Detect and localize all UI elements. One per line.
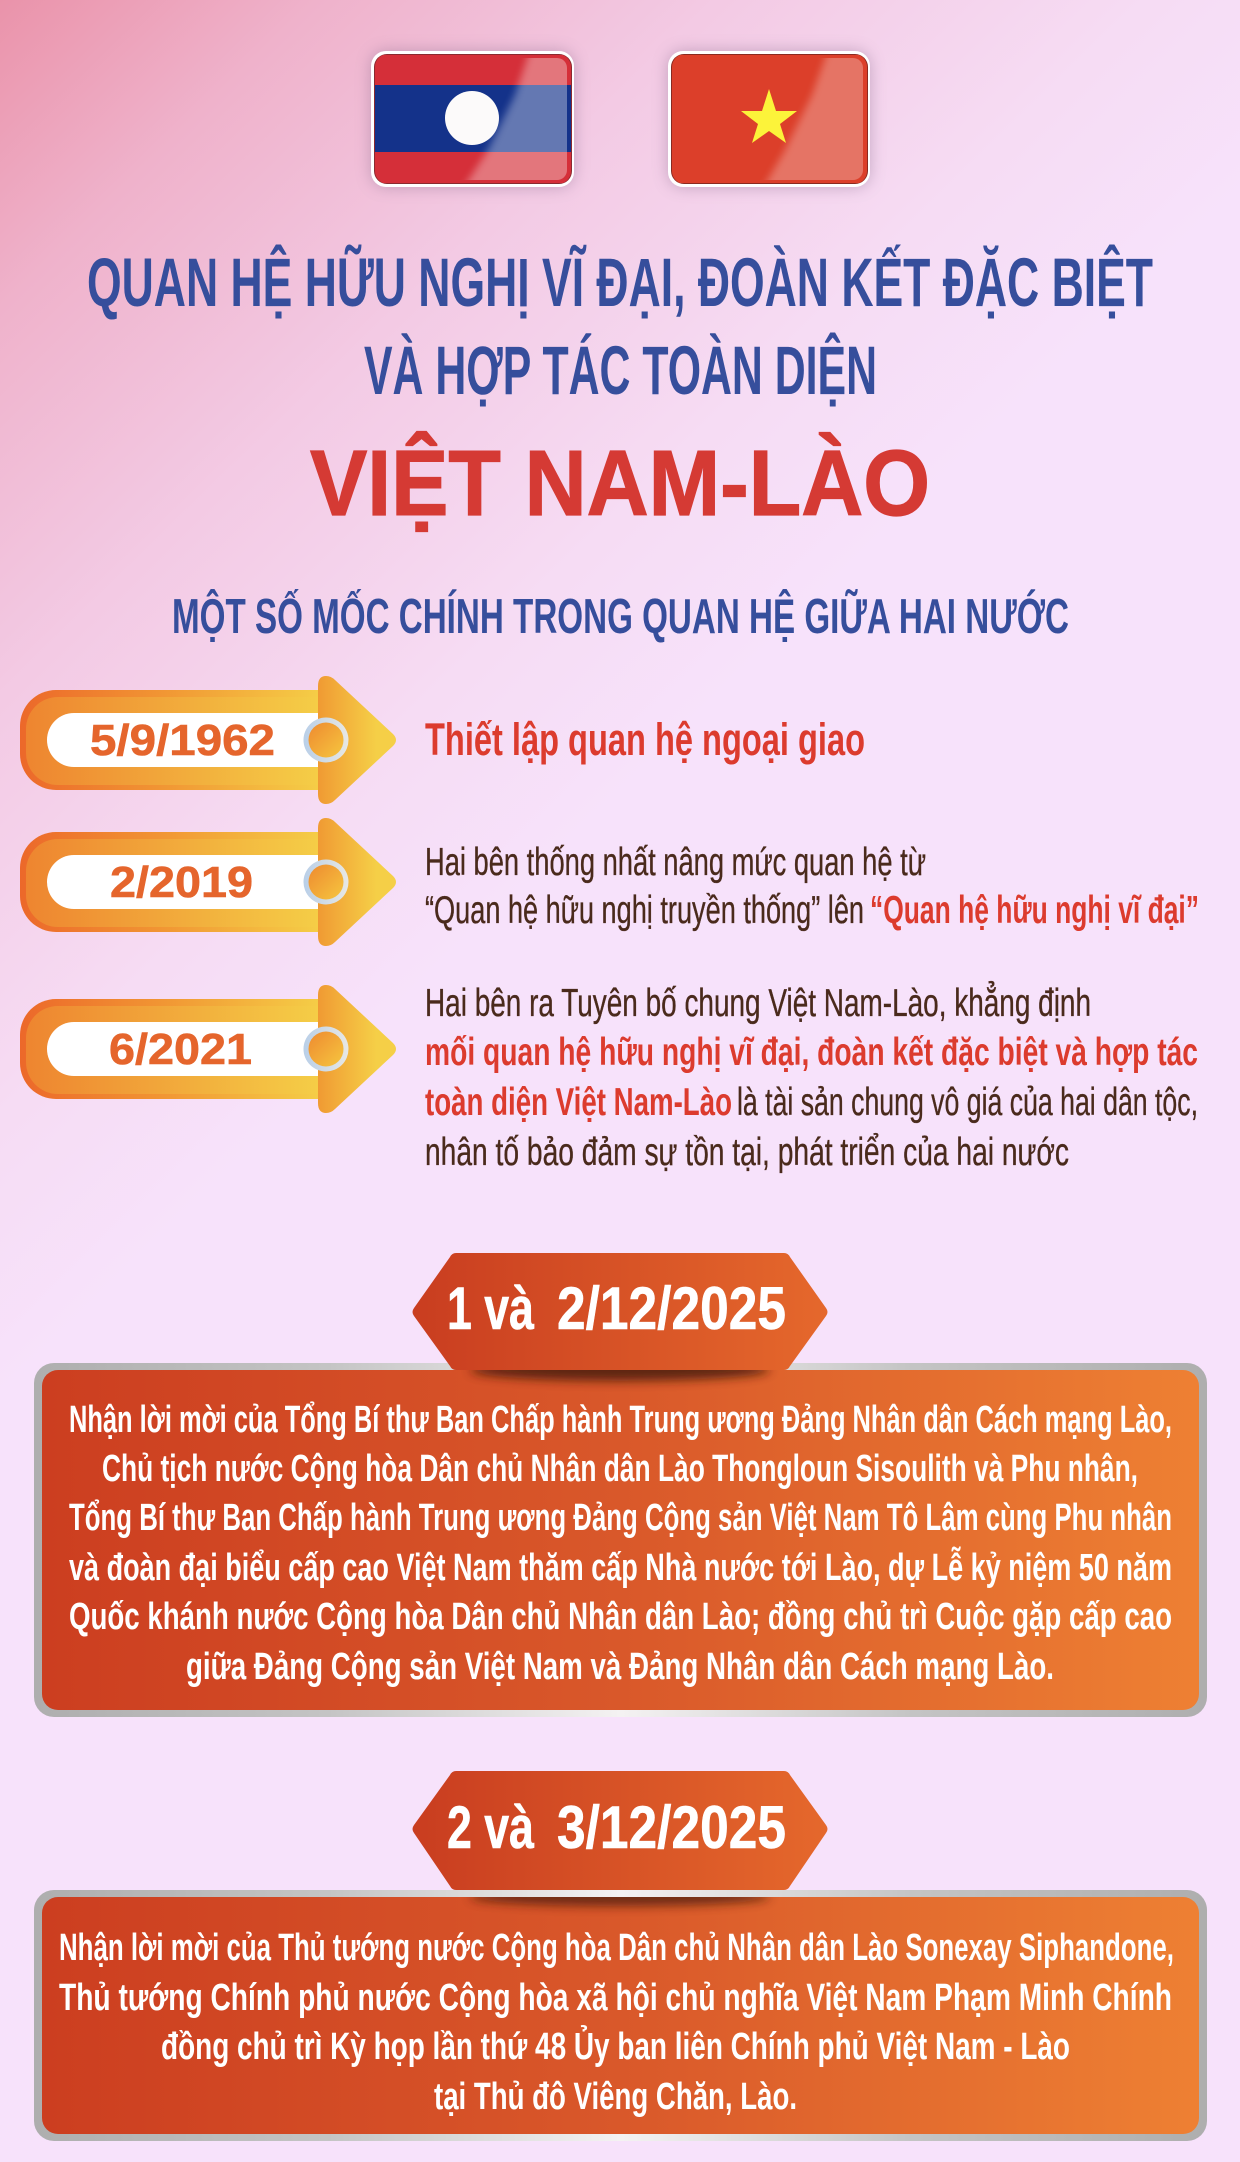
milestone arrow: 5/9/1962	[20, 676, 396, 804]
milestone text: 2/2019: Hai bên thống nhất nâng mức quan hệ từ	[425, 841, 926, 884]
milestone arrow: 2/2019: 2/2019	[110, 858, 253, 907]
date tag: 1 và 2/12/2025	[412, 1253, 828, 1370]
date tag: 1 và 2/12/2025: 2/12/2025	[557, 1275, 786, 1342]
title: VÀ HỢP TÁC TOÀN DIỆN	[364, 332, 877, 409]
milestone arrow: 6/2021	[20, 985, 396, 1113]
date tag: 2 và 3/12/2025: 2 và	[447, 1794, 534, 1861]
panel: 1 và 2/12/2025	[34, 1359, 1207, 1717]
milestone text: 6/2021: toàn diện Việt Nam-Lào	[425, 1081, 732, 1124]
milestone text: 2/2019: “Quan hệ hữu nghị truyền thống” lên	[425, 889, 864, 932]
milestone arrow: 6/2021: 6/2021	[109, 1025, 252, 1074]
date tag: 2 và 3/12/2025	[412, 1771, 828, 1890]
milestone arrow: 2/2019	[20, 818, 396, 946]
icon: Vietnam flag	[668, 50, 880, 190]
panel: 2 và 3/12/2025	[34, 1888, 1207, 2141]
date tag: 1 và 2/12/2025: 1 và	[447, 1275, 534, 1342]
title	[87, 244, 1153, 409]
milestone text: 5/9/1962: Thiết lập quan hệ ngoại giao	[425, 714, 865, 765]
panel: 2 và 3/12/2025: tại Thủ đô Viêng Chăn, Lào.	[434, 2076, 797, 2118]
milestone text: 6/2021	[425, 981, 1198, 1174]
milestone text: 2/2019	[425, 841, 1199, 932]
icon: Laos flag	[371, 50, 580, 190]
date tag: 2 và 3/12/2025: 3/12/2025	[557, 1794, 786, 1861]
milestone arrow: 5/9/1962: 5/9/1962	[90, 716, 275, 765]
heading: Việt Nam-Lào: VIỆT NAM-LÀO	[310, 431, 930, 535]
icon: star	[741, 89, 797, 143]
